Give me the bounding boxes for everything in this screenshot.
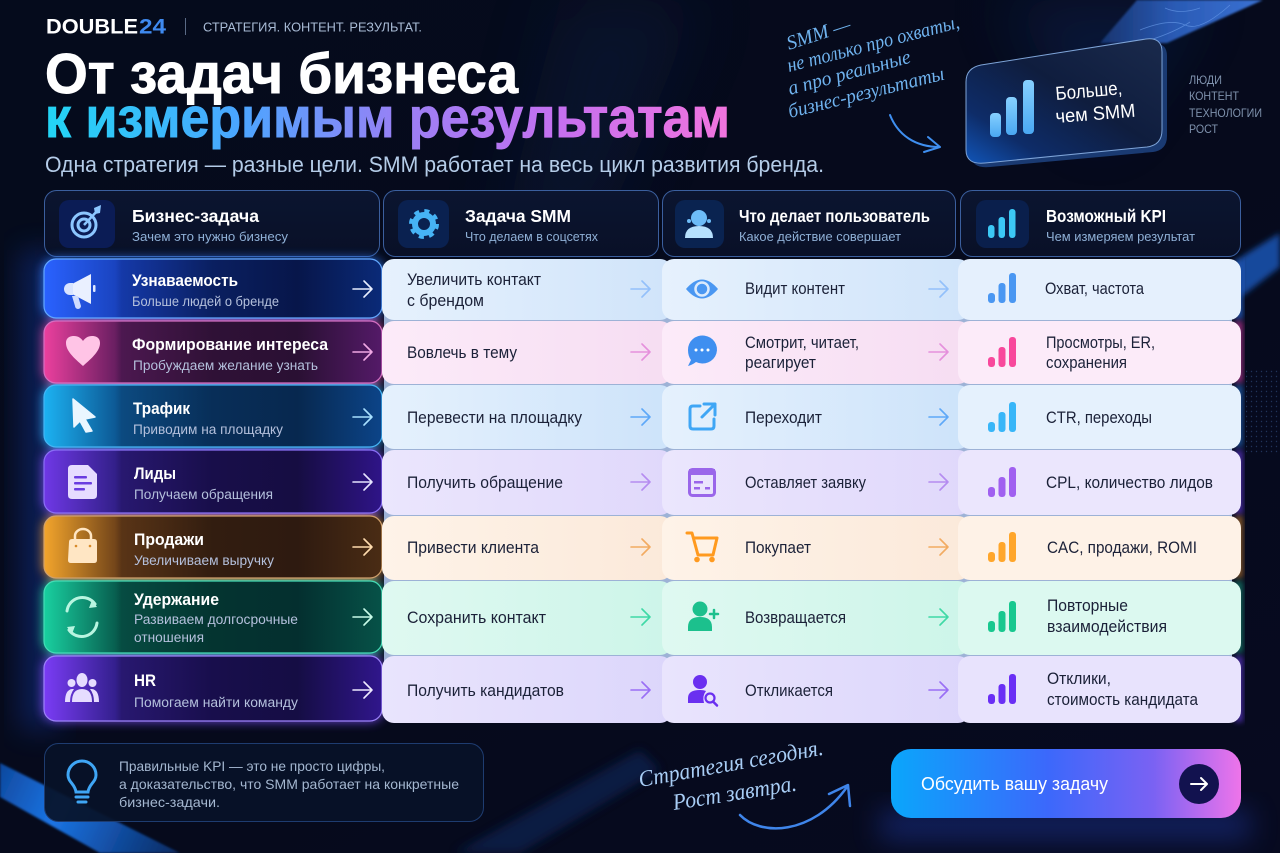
header: Задача SMM [384,190,658,256]
side list: ЛЮДИ [1189,73,1222,87]
cell: goal: Больше людей о бренде [132,294,279,309]
cell: KPI [958,581,1241,655]
cell: goal: Помогаем найти команду [134,695,298,710]
row: HR [44,656,1241,723]
row: Продажи [44,516,1241,580]
glows behind left column [42,258,384,722]
side list [1189,73,1262,136]
cell: user action [662,259,970,320]
cell: goal: Трафик [133,399,190,418]
row: Узнаваемость [44,259,1241,320]
cell: SMM task [382,450,672,515]
badge: Больше, чем SMM: Больше, [1055,78,1123,105]
badge: Больше, чем SMM: чем SMM [1055,101,1136,128]
callout: KPI note: а доказательство, что SMM работает на конкретные [119,776,459,792]
header: Задача SMM: Задача SMM [465,206,571,226]
cell: goal [44,385,382,447]
cell: goal [44,321,382,383]
handwritten note: SMM [784,11,962,123]
cell: SMM task: Сохранить контакт [407,609,546,627]
header: Возможный KPI: Возможный KPI [1046,206,1166,226]
cell: goal: Продажи [134,530,204,549]
header: Бизнес-задача [44,190,380,256]
cell: user action: реагирует [745,354,816,372]
title: От задач бизнеса [45,42,519,106]
header: Возможный KPI [960,190,1240,256]
cell: KPI: CAC, продажи, ROMI [1047,539,1197,557]
handwritten note: SMM: не только про охваты, [785,11,962,77]
callout: KPI note [44,744,484,822]
subtitle: Одна стратегия — разные цели. SMM работает на весь цикл развития бренда. [45,152,824,177]
cell: KPI [958,450,1241,515]
cell: goal: отношения [134,630,204,645]
cell: KPI: Отклики, [1047,670,1111,688]
cell: KPI: сохранения [1046,354,1127,372]
header: Бизнес-задача: Зачем это нужно бизнесу [132,229,289,244]
cell: SMM task [382,321,672,384]
cell: goal [44,581,382,653]
header: Что делает пользователь [662,190,956,256]
cell: SMM task [382,516,672,580]
cell: user action [662,516,970,580]
cell: goal [44,259,382,318]
handwritten slogan [637,735,825,815]
row: Лиды [44,450,1241,515]
cell: user action [662,450,970,515]
cell: SMM task [382,385,672,449]
row: Трафик [44,385,1241,449]
cell: goal: Приводим на площадку [133,422,283,437]
handwritten note: SMM: SMM — [784,13,854,55]
header: Возможный KPI: Чем измеряем результат [1046,229,1195,244]
handwritten slogan: Рост завтра. [670,771,798,815]
row: Формирование интереса [44,321,1241,384]
cell: goal: Увеличиваем выручку [134,553,274,568]
callout: KPI note: Правильные KPI — это не просто цифры, [119,758,385,774]
cell: goal: Развиваем долгосрочные [134,612,298,627]
backing behind light table cells [384,264,1232,716]
cell: SMM task: Перевести на площадку [407,409,583,427]
cell: goal: Получаем обращения [134,487,273,502]
button: Обсудить вашу задачу [891,749,1241,818]
icon: light bulb [68,761,96,802]
cell: SMM task: Получить обращение [407,474,563,492]
cell: KPI: Просмотры, ER, [1046,334,1155,352]
side list: КОНТЕНТ [1189,89,1240,103]
side list: РОСТ [1189,122,1219,136]
cell: goal: Лиды [134,464,176,483]
cell: user action: Оставляет заявку [745,474,867,492]
tagline: СТРАТЕГИЯ. КОНТЕНТ. РЕЗУЛЬТАТ. [203,20,422,34]
cell: SMM task: Увеличить контакт [407,271,541,289]
cell: KPI [958,656,1241,723]
cell: user action: Переходит [745,409,822,427]
cell: KPI [958,516,1241,580]
cell: KPI: CPL, количество лидов [1046,474,1213,492]
row: Удержание [44,581,1241,655]
cell: KPI [958,259,1241,320]
cell: user action: Покупает [745,539,811,557]
cell: SMM task: Привести клиента [407,539,540,557]
logo: DOUBLE [46,16,138,38]
cell: user action: Возвращается [745,609,846,627]
cell: user action: Смотрит, читает, [745,334,859,352]
cell: KPI [958,385,1241,449]
cell: goal [44,450,382,513]
cell: user action [662,321,970,384]
cell: goal: Удержание [134,590,219,609]
cell: SMM task [382,259,672,320]
cell: SMM task: Получить кандидатов [407,682,564,700]
cell: KPI: взаимодействия [1047,618,1167,636]
cell: user action [662,581,970,655]
header: Задача SMM: Что делаем в соцсетях [465,229,598,244]
cell: KPI: Повторные [1047,597,1128,615]
header: Что делает пользователь: Какое действие совершает [739,229,901,244]
cell: user action: Видит контент [745,280,845,298]
cell: user action: Откликается [745,682,833,700]
cell: goal: Узнаваемость [132,271,238,290]
logo: 24 [139,16,166,38]
button: Обсудить вашу задачу: Обсудить вашу задачу [921,773,1109,794]
handwritten note: SMM: а про реальные [786,46,913,100]
cell: user action [662,385,970,449]
cell: SMM task: с брендом [407,292,484,310]
callout: KPI note: бизнес-задачи. [119,794,220,810]
cell: KPI: CTR, переходы [1046,409,1152,427]
cell: KPI [958,321,1241,384]
title: к измеримым результатам [45,86,730,150]
handwritten note: SMM: бизнес-результаты [786,63,946,123]
cell: goal: Пробуждаем желание узнать [133,358,318,373]
arrow: growth [740,785,850,828]
cell: SMM task: Вовлечь в тему [407,344,518,362]
cell: goal: HR [134,671,156,690]
cell: goal [44,656,382,721]
side list: ТЕХНОЛОГИИ [1189,106,1262,120]
cell: goal: Формирование интереса [132,335,328,354]
handwritten slogan: Стратегия сегодня. [637,735,825,792]
arrow: note to badge [890,115,940,152]
header: Что делает пользователь: Что делает пользователь [739,206,930,226]
cell: SMM task [382,656,672,723]
cell: user action [662,656,970,723]
cell: KPI: стоимость кандидата [1047,691,1199,709]
header: Бизнес-задача: Бизнес-задача [132,206,259,226]
cell: SMM task [382,581,672,655]
cell: KPI: Охват, частота [1045,280,1145,298]
cell: goal [44,516,382,578]
title [45,42,730,150]
badge: Больше, чем SMM [966,39,1167,167]
